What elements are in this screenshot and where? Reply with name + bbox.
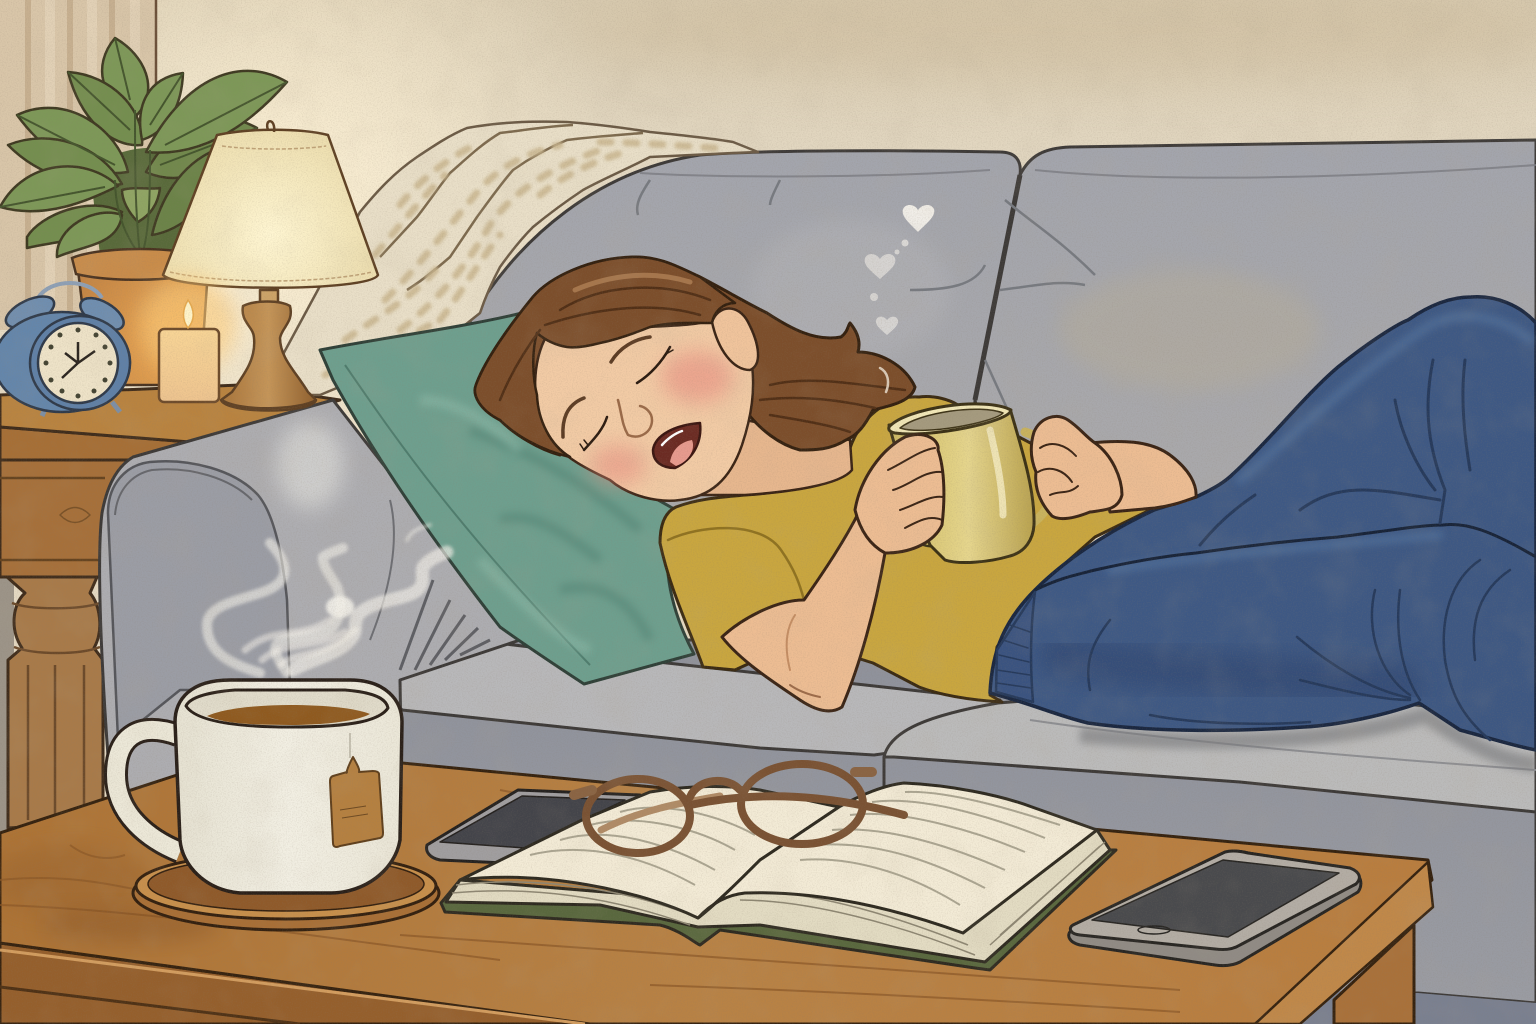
glasses xyxy=(574,764,904,853)
blush xyxy=(661,351,733,403)
right hand xyxy=(1031,416,1122,519)
alarm clock xyxy=(0,283,130,416)
coaster xyxy=(133,853,439,930)
jeans shading and folds xyxy=(996,317,1536,740)
mug handle xyxy=(1025,432,1054,525)
mug opening xyxy=(186,690,388,727)
clock face xyxy=(38,323,118,403)
lamp shade xyxy=(163,130,378,288)
mug body xyxy=(175,680,402,893)
tea xyxy=(207,705,370,725)
right page xyxy=(698,783,1097,933)
jeans xyxy=(990,297,1536,750)
closed eyes xyxy=(637,347,670,383)
small heart xyxy=(876,317,898,335)
far arm xyxy=(1090,441,1196,512)
curtain xyxy=(0,0,156,330)
plant xyxy=(0,38,287,257)
front phone xyxy=(1069,851,1361,966)
front arm and hand xyxy=(722,435,944,711)
wall piece beside leg xyxy=(0,577,14,832)
green pillow xyxy=(320,313,694,684)
temples xyxy=(601,796,720,830)
table top xyxy=(0,385,340,442)
coffee table xyxy=(0,760,1433,1024)
waistband xyxy=(996,592,1035,702)
arm fold stripes xyxy=(400,580,490,670)
mug body xyxy=(889,412,1034,563)
back hair xyxy=(475,257,915,455)
mug rim xyxy=(889,404,1011,434)
left lens xyxy=(586,779,690,853)
leg folds xyxy=(1200,360,1470,545)
tea tag xyxy=(330,757,383,847)
back phone xyxy=(427,790,640,865)
table lip xyxy=(0,427,190,460)
steam xyxy=(207,525,447,673)
woman xyxy=(475,257,1536,750)
left back cushion xyxy=(470,151,1020,560)
hair strands xyxy=(500,288,905,432)
turned table leg xyxy=(7,577,103,828)
right back cushion xyxy=(975,140,1536,520)
front apron xyxy=(0,943,590,1024)
open book xyxy=(441,783,1116,970)
sofa back cushions xyxy=(470,140,1536,560)
floor xyxy=(1290,990,1536,1024)
right lens xyxy=(741,764,863,844)
page block xyxy=(446,830,1110,962)
nose xyxy=(618,400,652,437)
mug handle xyxy=(116,730,180,852)
table lamp xyxy=(163,121,378,410)
lamp base xyxy=(260,290,278,305)
front lip xyxy=(0,950,585,1024)
left page xyxy=(460,786,839,918)
tabletop xyxy=(0,760,1432,1024)
candle xyxy=(140,277,236,402)
eyebrows xyxy=(611,337,650,362)
heart leaf xyxy=(122,188,160,222)
yellow mug xyxy=(889,404,1054,563)
face xyxy=(535,320,753,501)
large heart xyxy=(903,205,934,232)
dense centre foliage xyxy=(90,148,230,255)
shirt xyxy=(660,397,1154,702)
left seat cushion xyxy=(377,643,1000,755)
arm front panel xyxy=(108,461,290,740)
cushion stain and puckers xyxy=(637,180,1320,415)
hearts xyxy=(865,205,934,335)
sofa seat base xyxy=(360,640,1536,1024)
sofa arm xyxy=(100,400,520,815)
right side face xyxy=(1255,862,1433,1024)
blanket blotches xyxy=(325,142,715,375)
fringe xyxy=(475,257,735,457)
table apron xyxy=(0,458,140,577)
book cover xyxy=(441,850,1116,970)
mouth xyxy=(653,423,700,468)
middle heart xyxy=(865,254,895,279)
neck xyxy=(700,420,852,495)
phone screen xyxy=(1092,860,1339,937)
right seat cushion xyxy=(884,695,1536,812)
flower pot xyxy=(72,249,208,385)
main crease xyxy=(1035,524,1536,590)
wood grain xyxy=(0,790,1180,1012)
tea mug xyxy=(116,680,402,893)
sleeve line xyxy=(668,528,804,600)
text lines xyxy=(530,792,1060,905)
side table xyxy=(0,385,340,832)
ear xyxy=(712,308,758,370)
bridge xyxy=(690,781,740,797)
blanket xyxy=(280,122,758,395)
table leg xyxy=(1334,925,1414,1024)
seat shadow under jeans xyxy=(1080,715,1536,765)
